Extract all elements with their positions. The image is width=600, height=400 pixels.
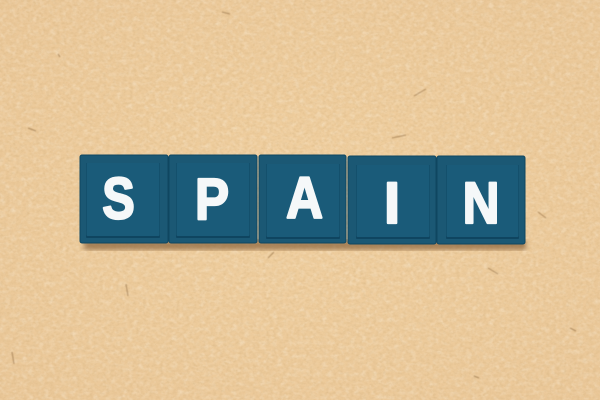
- tile shadow: [84, 240, 526, 250]
- tile row: [80, 155, 525, 244]
- letter N: N: [463, 171, 499, 236]
- tile: P: [169, 155, 257, 243]
- tile: N: [437, 156, 525, 244]
- letter P: P: [195, 167, 229, 232]
- letter I: I: [384, 171, 400, 236]
- tile: S: [80, 155, 168, 243]
- tile: I: [348, 156, 436, 244]
- letter A: A: [286, 166, 323, 231]
- letter S: S: [102, 168, 135, 231]
- tile: A: [259, 155, 346, 243]
